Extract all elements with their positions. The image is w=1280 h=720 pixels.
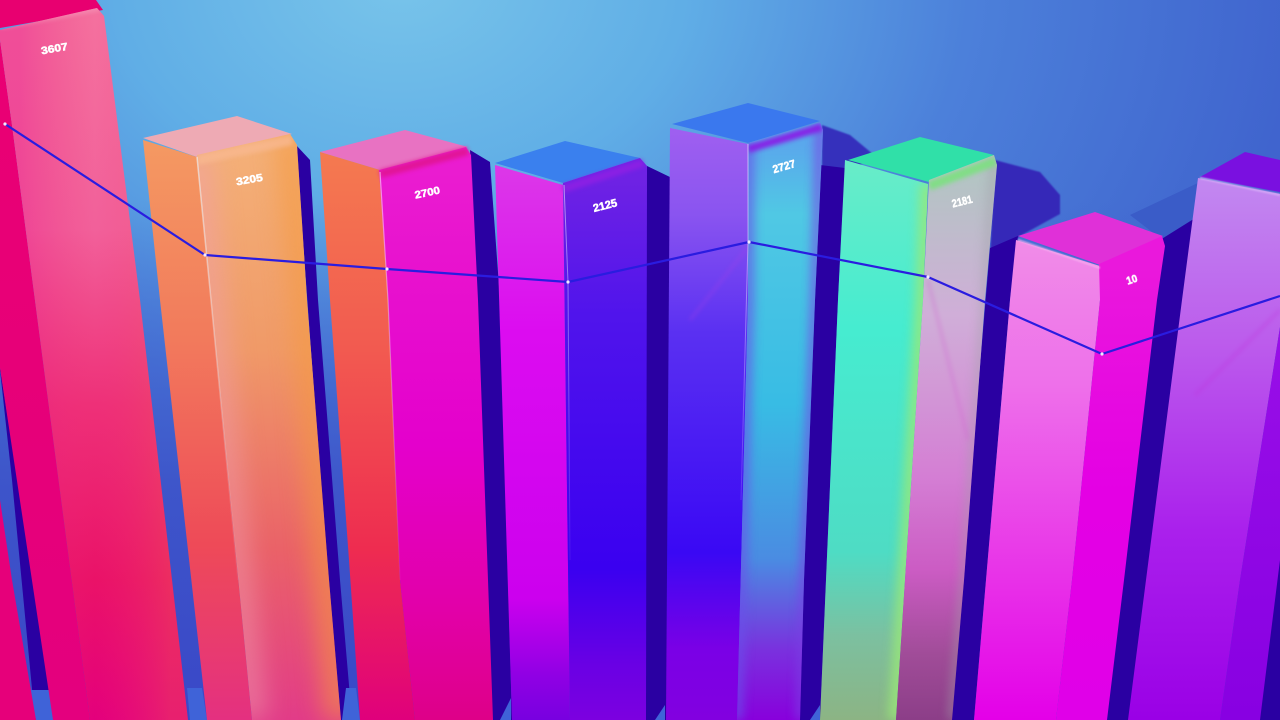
bar 8 [1128,152,1280,720]
value labels on bars: 2125 [592,197,619,215]
bar 2 [143,116,341,720]
value labels on bars: 2181 [951,194,974,211]
value labels on bars [40,41,1139,288]
bar 6 [820,137,997,720]
bar 4 [495,141,647,720]
bar 0: clipped bar at far left [0,500,36,720]
value labels on bars: 10 [1125,273,1139,288]
bar 1 [0,0,188,720]
bar 7 [974,212,1165,720]
value labels on bars: 2700 [414,185,441,201]
value labels on bars: 2727 [771,158,797,176]
value labels on bars: 3205 [235,172,264,188]
bar 3 [320,130,493,720]
value labels on bars: 3607 [40,41,69,57]
line chart trend line [3,122,1280,356]
line markers [3,122,1104,356]
bar 5 [666,103,823,720]
